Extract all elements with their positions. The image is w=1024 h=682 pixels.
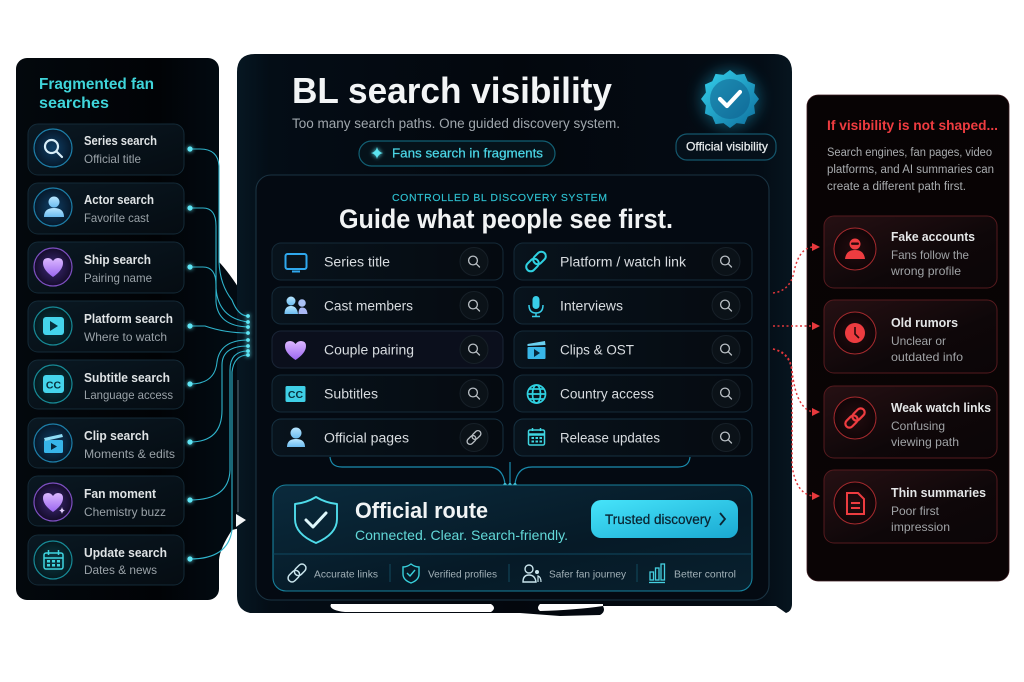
benefit: accurate links: Accurate links [314, 568, 378, 580]
row: cast members [272, 287, 503, 324]
card: fake accounts: Fake accounts [891, 230, 975, 244]
row: country access [514, 375, 752, 412]
benefit: better control: Better control [674, 568, 736, 580]
subtitle: Too many search paths. One guided discovery system. [292, 116, 620, 131]
card: ship search: Ship search [84, 253, 151, 267]
row: cast members: Cast members [324, 298, 413, 314]
card: old rumors [824, 300, 997, 373]
row: release updates: Release updates [560, 430, 660, 446]
row: interviews [514, 287, 752, 324]
connector dots [187, 146, 250, 562]
description text: Search engines, fan pages, video [827, 147, 992, 159]
row: clips and OST: Clips & OST [560, 342, 634, 358]
heading: BL search visibility: BL search visibility [292, 70, 612, 111]
button: trusted discovery [591, 500, 738, 538]
row: country access: Country access [560, 386, 654, 402]
card: thin summaries [824, 470, 997, 543]
card: clip search: Moments & edits [84, 447, 175, 461]
card: thin summaries: impression [891, 520, 950, 534]
benefit: better control [649, 564, 736, 582]
card: update search [28, 535, 184, 585]
card: series search: Official title [84, 152, 141, 166]
panel: official route [273, 485, 752, 591]
card: thin summaries: Thin summaries [891, 486, 986, 500]
row: clips and OST [514, 331, 752, 368]
row: couple pairing [272, 331, 503, 368]
card: subtitle search: Subtitle search [84, 371, 170, 385]
row: interviews: Interviews [560, 298, 623, 314]
row: platform / watch link [514, 243, 752, 280]
connectors: searches into central hub [187, 146, 250, 562]
card: actor search: Favorite cast [84, 211, 150, 225]
small white notch on left edge [236, 514, 246, 527]
benefit: verified profiles: Verified profiles [428, 568, 497, 580]
benefit: safer fan journey: Safer fan journey [549, 568, 627, 580]
card: subtitle search [28, 360, 184, 409]
row: release updates [514, 419, 752, 456]
card: platform search: Where to watch [84, 330, 167, 344]
icon: official verified badge [700, 69, 760, 129]
card: old rumors: Old rumors [891, 316, 958, 330]
card: weak watch links [824, 386, 997, 458]
heading: official route: Official route [355, 498, 488, 523]
card: platform search [28, 301, 184, 352]
benefit: verified profiles [403, 564, 497, 583]
row: subtitles: CC [288, 389, 303, 401]
description text: platforms, and AI summaries can [827, 164, 994, 176]
heading: if visibility is not shaped: If visibility is not shaped... [827, 117, 998, 133]
card: actor search [28, 183, 184, 234]
card: subtitle search: Language access [84, 388, 173, 402]
card: update search: Dates & news [84, 563, 157, 577]
route subtitle: Connected. Clear. Search-friendly. [355, 527, 568, 543]
arrowheads [812, 243, 820, 500]
heading: guide what people see first: Guide what people see first. [339, 204, 673, 234]
heading: fragmented fan searches [39, 76, 154, 112]
eyebrow label: CONTROLLED BL DISCOVERY SYSTEM [392, 192, 607, 204]
card: ship search [28, 242, 184, 293]
card: fan moment: Fan moment [84, 487, 157, 501]
card: series search [28, 124, 184, 175]
bridge between left and centre panels [215, 258, 240, 560]
benefit: safer fan journey [523, 565, 627, 582]
pill: official visibility: Official visibility [686, 140, 768, 154]
bracket connector into official route [330, 457, 690, 486]
arrows: risk paths to red cards [773, 243, 820, 500]
heading: fragmented fan searches: searches [39, 95, 109, 112]
heading: fragmented fan searches: Fragmented fan [39, 76, 154, 93]
icon: shield check [295, 497, 337, 543]
pill: official visibility [676, 134, 776, 160]
row: subtitles [272, 375, 503, 412]
panel: central discovery system [187, 54, 1009, 616]
description text [827, 147, 994, 193]
left edge light sliver [237, 380, 239, 512]
row: official pages: Official pages [324, 430, 409, 446]
card: fan moment [28, 476, 184, 526]
panel: if visibility is not shaped [807, 95, 1009, 581]
card: actor search: Actor search [84, 193, 154, 207]
card: fake accounts: wrong profile [890, 264, 961, 278]
card: clip search [28, 418, 184, 468]
card: fan moment: Chemistry buzz [84, 505, 166, 519]
panel: fragmented fan searches [16, 58, 219, 600]
card: platform search: Platform search [84, 312, 173, 326]
row: couple pairing: Couple pairing [324, 342, 414, 358]
benefit: accurate links [286, 562, 378, 584]
card: weak watch links: viewing path [891, 435, 959, 449]
card: old rumors: Unclear or [891, 334, 946, 348]
row: subtitles: Subtitles [324, 386, 378, 402]
card: ship search: Pairing name [84, 271, 152, 285]
card: fake accounts: Fans follow the [891, 248, 969, 262]
card: weak watch links: Weak watch links [891, 401, 991, 415]
pill: fans search in fragments: Fans search in fragments [392, 146, 544, 160]
row: series title [272, 243, 503, 280]
panel: controlled discovery system [256, 175, 769, 600]
bottom edge gaps [331, 604, 603, 612]
description text: create a different path first. [827, 181, 966, 193]
card: clip search: Clip search [84, 429, 149, 443]
row: platform / watch link: Platform / watch link [560, 254, 686, 270]
row: official pages [272, 419, 503, 456]
card: update search: Update search [84, 546, 167, 560]
card: thin summaries: Poor first [891, 504, 940, 518]
row: series title: Series title [324, 254, 390, 270]
card: series search: Series search [84, 134, 157, 148]
card: subtitle search: CC [46, 380, 61, 392]
card: old rumors: outdated info [891, 350, 963, 364]
pill: fans search in fragments [359, 141, 555, 166]
card: weak watch links: Confusing [891, 419, 945, 433]
card: fake accounts [824, 216, 997, 288]
button: trusted discovery: Trusted discovery [605, 512, 711, 527]
